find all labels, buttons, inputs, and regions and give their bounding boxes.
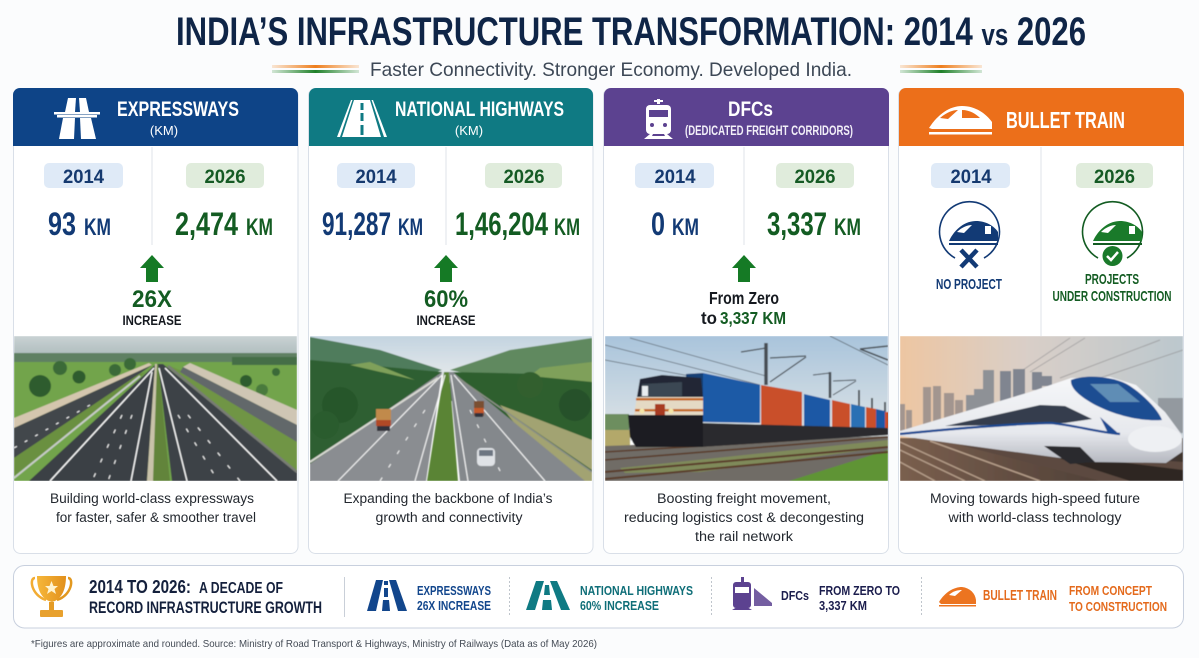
icon: bullet train — [929, 106, 992, 134]
caption: the rail network — [695, 529, 793, 544]
panel: summary band — [14, 566, 1184, 628]
bullet train header — [899, 88, 1184, 146]
highways unit: (KM) — [455, 123, 483, 138]
expressways header — [13, 88, 298, 146]
subtitle: Faster Connectivity. Stronger Economy. Developed India. — [370, 59, 852, 81]
value 2026: KM — [554, 214, 580, 241]
year divider — [1040, 147, 1042, 336]
band heading — [89, 576, 322, 617]
truck left — [376, 409, 391, 431]
dfc header — [604, 88, 889, 146]
value 2014: KM — [84, 214, 111, 241]
panel: dfcs — [604, 88, 889, 554]
value 2014: KM — [398, 214, 423, 241]
no project label: NO PROJECT — [936, 276, 1002, 293]
photo: highway — [310, 336, 592, 482]
icon: highway road — [526, 581, 570, 610]
value 2014: KM — [672, 214, 699, 241]
bullet train heading: BULLET TRAIN — [1006, 107, 1125, 133]
panel: expressways — [13, 88, 298, 554]
bullet train summary: FROM CONCEPT — [1069, 584, 1152, 598]
photo: freight train — [605, 336, 889, 481]
growth label: INCREASE — [122, 312, 182, 328]
value 2026: 3,337 — [767, 206, 827, 242]
band heading: 2014 TO 2026: — [89, 576, 191, 597]
value 2014 — [651, 206, 699, 242]
value 2014: 0 — [651, 206, 665, 242]
icon: motorway — [54, 98, 100, 139]
2014 pill — [635, 163, 714, 188]
growth figure: 60% — [424, 286, 468, 313]
icon: dfc train — [732, 577, 772, 610]
arrow: up — [434, 255, 458, 282]
caption — [930, 491, 1140, 525]
2014 pill: 2014 — [654, 167, 696, 188]
2026 pill — [1076, 163, 1153, 188]
subtitle — [272, 59, 982, 81]
value 2026: KM — [834, 214, 861, 241]
value 2026: 2,474 — [175, 206, 238, 242]
caption: for faster, safer & smoother travel — [56, 510, 256, 525]
dfc summary: DFCs — [781, 588, 809, 603]
icon: trophy — [32, 576, 71, 617]
arrow: up — [732, 255, 756, 282]
value 2026: 1,46,204 — [455, 206, 548, 242]
caption: Building world-class expressways — [50, 491, 254, 506]
containers — [686, 373, 889, 428]
2014 pill — [337, 163, 415, 188]
2014 pill: 2014 — [950, 167, 992, 188]
expressways summary: EXPRESSWAYS — [417, 584, 491, 598]
expressways summary: 26X INCREASE — [417, 599, 491, 613]
caption — [50, 491, 256, 525]
highways heading: NATIONAL HIGHWAYS — [395, 98, 564, 121]
highways header — [309, 88, 593, 146]
2026 pill: 2026 — [1094, 167, 1135, 188]
icon: no project — [940, 202, 1000, 267]
caption: with world-class technology — [947, 510, 1122, 525]
bullet train summary — [983, 584, 1167, 614]
growth text: From Zero — [709, 288, 779, 308]
arrow: up — [140, 255, 164, 282]
icon: orange bullet train — [939, 587, 976, 606]
2014 pill — [44, 163, 123, 188]
year divider — [743, 147, 745, 245]
value 2014 — [48, 206, 111, 242]
2026 pill: 2026 — [204, 167, 246, 188]
under construction label: PROJECTS — [1085, 271, 1139, 288]
icon: expressways road — [367, 580, 407, 611]
caption: reducing logistics cost & decongesting — [624, 510, 864, 525]
photo: expressway — [14, 336, 297, 481]
expressways unit: (KM) — [150, 123, 178, 138]
panel: bullet train — [898, 88, 1184, 554]
under construction label — [1052, 271, 1172, 305]
2014 pill: 2014 — [63, 167, 104, 188]
band heading: RECORD INFRASTRUCTURE GROWTH — [89, 599, 322, 617]
dfc subheading: (DEDICATED FREIGHT CORRIDORS) — [685, 123, 853, 138]
dfc summary — [781, 584, 900, 613]
truck right — [474, 401, 484, 417]
caption: Boosting freight movement, — [657, 491, 831, 506]
highways summary: 60% INCREASE — [580, 599, 659, 613]
value 2026: KM — [246, 214, 273, 241]
caption: growth and connectivity — [376, 510, 523, 525]
growth text: to — [701, 308, 717, 328]
2026 pill — [485, 163, 562, 188]
value 2014: 91,287 — [322, 206, 391, 242]
title: INDIA’S INFRASTRUCTURE TRANSFORMATION: 2014 vs 2026 — [176, 10, 1086, 54]
year divider — [151, 147, 153, 245]
2014 pill — [931, 163, 1010, 188]
bullet train summary: TO CONSTRUCTION — [1069, 600, 1167, 614]
dfc summary: 3,337 KM — [819, 599, 867, 613]
growth label: INCREASE — [416, 312, 476, 328]
2014 pill: 2014 — [356, 167, 397, 188]
ground and tracks — [605, 436, 888, 481]
panel: national highways — [308, 88, 593, 554]
expressways summary — [417, 584, 491, 613]
locomotive — [628, 375, 703, 447]
photo: bullet train — [900, 336, 1183, 481]
growth text — [701, 288, 786, 328]
icon: highway — [337, 100, 387, 137]
2026 pill — [776, 163, 854, 188]
caption — [344, 491, 553, 525]
chassis — [700, 423, 888, 447]
dfc heading: DFCs — [728, 98, 773, 121]
car — [477, 448, 495, 466]
2026 pill — [186, 163, 264, 188]
dfc summary: FROM ZERO TO — [819, 584, 900, 598]
highways summary — [580, 584, 693, 613]
expressways heading: EXPRESSWAYS — [117, 98, 239, 121]
caption — [624, 491, 864, 544]
icon: projects under construction — [1082, 202, 1142, 266]
icon: train — [644, 99, 673, 139]
caption: Expanding the backbone of India’s — [344, 491, 553, 506]
year divider — [445, 147, 447, 245]
growth text: 3,337 KM — [720, 308, 786, 328]
2026 pill: 2026 — [794, 167, 836, 188]
footnote: *Figures are approximate and rounded. Source: Ministry of Road Transport & Highways, Ministry of Railways (Data as of May 2026) — [31, 638, 597, 650]
caption: Moving towards high-speed future — [930, 491, 1140, 506]
bullet train summary: BULLET TRAIN — [983, 587, 1057, 604]
value 2014: 93 — [48, 206, 76, 242]
band heading: A DECADE OF — [199, 580, 283, 597]
highways summary: NATIONAL HIGHWAYS — [580, 584, 693, 598]
growth figure: 26X — [132, 286, 172, 313]
2026 pill: 2026 — [504, 167, 544, 188]
